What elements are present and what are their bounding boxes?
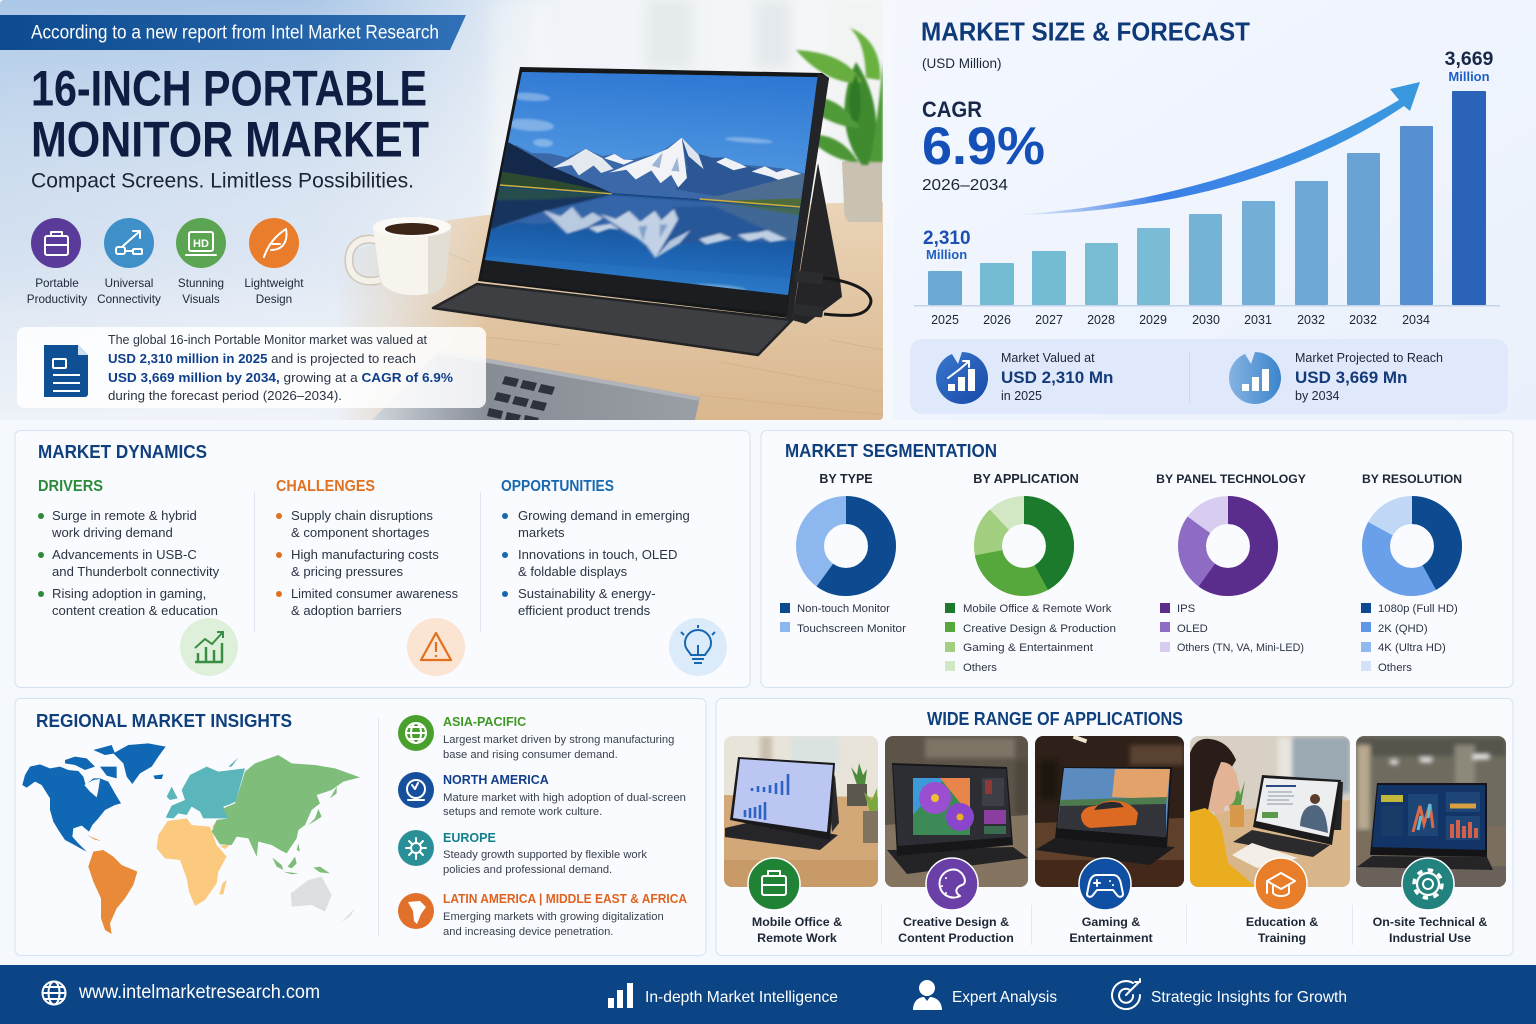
map: south america — [87, 835, 137, 934]
stat: market projected — [1295, 351, 1443, 403]
value label 2025 — [923, 228, 971, 262]
map: north america — [22, 745, 121, 852]
column: drivers — [38, 478, 238, 676]
stat: market projected: by 2034 — [1295, 389, 1340, 403]
desk — [300, 202, 883, 420]
icon: bars — [608, 983, 633, 1008]
map: africa — [157, 818, 232, 906]
legend: Others — [963, 662, 997, 674]
map: hudson bay — [84, 779, 100, 797]
icon: light bulb — [669, 618, 727, 676]
region: asia-pacific — [398, 715, 674, 761]
cable — [792, 271, 871, 318]
plant — [796, 28, 883, 222]
panel: regional market insights — [15, 698, 706, 956]
legend: 2K (QHD) — [1378, 623, 1428, 635]
CAGR callout — [922, 97, 1045, 194]
legend: Others (TN, VA, Mini-LED) — [1177, 642, 1304, 654]
icon: warning — [407, 618, 465, 676]
year labels: 2028 — [1087, 313, 1115, 327]
donut: by application — [945, 472, 1116, 674]
feature labels: Portable — [35, 277, 79, 290]
monitor base cover — [433, 284, 792, 355]
title: MONITOR MARKET — [31, 112, 429, 168]
heading: MARKET SIZE & FORECAST — [921, 16, 1250, 46]
map: asia — [212, 755, 360, 874]
application labels: Content Production — [898, 931, 1014, 945]
column: challenges: High manufacturing costs — [291, 547, 439, 562]
year labels: 2026 — [983, 313, 1011, 327]
year labels: 2025 — [931, 313, 959, 327]
application labels: Training — [1258, 931, 1306, 945]
icon: game controller — [1079, 858, 1131, 910]
column: opportunities — [501, 478, 727, 676]
subtitle: Compact Screens. Limitless Possibilities. — [31, 170, 414, 192]
column: opportunities: Innovations in touch, OLED — [518, 547, 677, 562]
column: opportunities: efficient product trends — [518, 603, 651, 618]
monitor frame — [478, 67, 829, 320]
column: challenges — [276, 478, 465, 676]
feature labels: Stunning — [178, 277, 224, 290]
value label 2034 — [1445, 48, 1494, 84]
stat: market projected: USD 3,669 Mn — [1295, 368, 1407, 387]
panel: market dynamics — [15, 430, 750, 688]
value label 2034: Million — [1448, 69, 1490, 84]
feature labels: Lightweight — [244, 277, 304, 290]
application labels: Education & — [1246, 915, 1318, 929]
year labels: 2031 — [1244, 313, 1272, 327]
value label 2034: 3,669 — [1445, 48, 1494, 70]
laptop — [372, 350, 700, 420]
photo: creative design — [885, 736, 1028, 887]
stat: market projected: Market Projected to Reach — [1295, 351, 1443, 365]
region: latin america, middle east and africa: Emerging markets with growing digitalization — [443, 911, 664, 923]
column: drivers: Rising adoption in gaming, — [52, 586, 206, 601]
banner — [0, 15, 466, 50]
icon: expert — [913, 980, 942, 1010]
icon: lightweight design — [249, 218, 299, 268]
title — [31, 60, 429, 168]
world map — [22, 743, 360, 934]
column: drivers: and Thunderbolt connectivity — [52, 564, 220, 579]
year labels: 2030 — [1192, 313, 1220, 327]
donut: by panel technology: BY PANEL TECHNOLOGY — [1156, 472, 1306, 486]
region: latin america, middle east and africa — [398, 892, 687, 938]
region: latin america, middle east and africa: LATIN AMERICA | MIDDLE EAST & AFRICA — [443, 892, 687, 906]
summary text: USD 3,669 million by 2034, growing at a CAGR of 6.9% — [108, 370, 453, 385]
heading: REGIONAL MARKET INSIGHTS — [36, 711, 292, 731]
legend: Creative Design & Production — [963, 623, 1116, 635]
legend: 4K (Ultra HD) — [1378, 642, 1446, 654]
application labels: Gaming & — [1082, 915, 1140, 929]
monitor screen: mountains and lake — [485, 72, 818, 295]
year labels — [931, 313, 1430, 327]
column: opportunities: markets — [518, 525, 565, 540]
panel: market segmentation — [761, 430, 1513, 688]
icon: portable productivity — [31, 218, 81, 268]
stat: market valued: USD 2,310 Mn — [1001, 368, 1113, 387]
CAGR callout: 6.9% — [922, 117, 1045, 176]
icon: document — [44, 345, 88, 397]
heading: MARKET SEGMENTATION — [785, 441, 997, 461]
value label 2025: 2,310 — [923, 228, 971, 249]
donut: by type — [780, 472, 906, 635]
legend: OLED — [1177, 623, 1208, 635]
column: drivers: Advancements in USB-C — [52, 547, 197, 562]
panel: wide range of applications — [716, 698, 1513, 956]
legend: Touchscreen Monitor — [797, 623, 906, 635]
map: greenland — [113, 743, 166, 784]
icon: market valued — [936, 352, 988, 404]
bar chart — [914, 91, 1500, 327]
legend — [780, 603, 906, 635]
icon: palette — [926, 858, 978, 910]
feature labels: Visuals — [182, 293, 220, 306]
legend: Others — [1378, 662, 1412, 674]
label: strategic insights: Strategic Insights for Growth — [1151, 989, 1347, 1006]
photo: mobile office — [724, 736, 878, 887]
column: drivers: Surge in remote & hybrid — [52, 508, 197, 523]
application labels: Industrial Use — [1389, 931, 1471, 945]
column: drivers: DRIVERS — [38, 478, 103, 495]
title: 16-INCH PORTABLE — [31, 60, 427, 116]
region: latin america, middle east and africa: and increasing device penetration. — [443, 926, 613, 938]
mountain range — [495, 125, 818, 207]
year labels: 2034 — [1402, 313, 1430, 327]
legend — [1160, 603, 1304, 654]
CAGR callout: 2026–2034 — [922, 177, 1008, 194]
banner: According to a new report from Intel Market Research — [31, 22, 439, 44]
photo: education — [1190, 736, 1350, 887]
panel: market size and forecast — [893, 0, 1536, 420]
summary text — [108, 332, 453, 403]
arrow: growth trend — [1015, 82, 1420, 215]
column: challenges: & component shortages — [291, 525, 430, 540]
column: opportunities: Sustainability & energy- — [518, 586, 656, 601]
heading: WIDE RANGE OF APPLICATIONS — [927, 709, 1183, 729]
icon: target — [1112, 979, 1140, 1009]
legend — [945, 603, 1116, 674]
label: expert analysis: Expert Analysis — [952, 989, 1057, 1006]
region: europe: policies and professional demand. — [443, 864, 612, 876]
summary text: The global 16-inch Portable Monitor market was valued at — [108, 332, 427, 347]
application labels: On-site Technical & — [1373, 915, 1487, 929]
icon: graduation cap — [1255, 858, 1307, 910]
region: asia-pacific: ASIA-PACIFIC — [443, 715, 526, 729]
column: challenges: Supply chain disruptions — [291, 508, 433, 523]
CAGR callout: CAGR — [922, 97, 982, 122]
column: drivers: work driving demand — [51, 525, 173, 540]
legend: 1080p (Full HD) — [1378, 603, 1458, 615]
stat: market valued: in 2025 — [1001, 389, 1042, 403]
region: europe — [398, 830, 647, 876]
donut: by panel technology — [1156, 472, 1306, 654]
donut: by application: BY APPLICATION — [973, 472, 1079, 486]
photo: industrial — [1356, 736, 1506, 887]
column: opportunities: OPPORTUNITIES — [501, 478, 614, 495]
column: challenges: & adoption barriers — [291, 603, 402, 618]
feature labels: Design — [256, 293, 292, 306]
legend: Non-touch Monitor — [797, 603, 890, 615]
website: www.intelmarketresearch.com — [78, 982, 320, 1003]
year labels: 2027 — [1035, 313, 1063, 327]
donut: by resolution: BY RESOLUTION — [1362, 472, 1462, 486]
icon: briefcase — [748, 858, 800, 910]
legend: Gaming & Entertainment — [963, 642, 1094, 654]
stat strip — [910, 339, 1508, 414]
icon: market projected — [1229, 352, 1281, 404]
region: north america — [398, 772, 686, 818]
icon row: features — [31, 218, 299, 268]
region: asia-pacific: base and rising consumer demand. — [443, 749, 618, 761]
mug — [349, 217, 451, 295]
feature labels: Universal — [105, 277, 153, 290]
icon: gear — [1402, 858, 1454, 910]
monitor side edge — [786, 73, 829, 320]
map: australia — [291, 877, 355, 922]
feature labels: Productivity — [27, 293, 87, 306]
icon: growth chart — [180, 618, 238, 676]
footer — [0, 965, 1536, 1024]
column: challenges: Limited consumer awareness — [291, 586, 458, 601]
summary text: during the forecast period (2026–2034). — [108, 388, 342, 403]
application labels: Remote Work — [757, 931, 837, 945]
feature labels — [27, 277, 304, 306]
column: challenges: CHALLENGES — [276, 478, 375, 495]
region: north america: setups and remote work culture. — [443, 806, 602, 818]
photo: gaming — [1035, 735, 1184, 887]
column: drivers: content creation & education — [52, 603, 218, 618]
region: north america: Mature market with high adoption of dual-screen — [443, 792, 686, 804]
column: opportunities: Growing demand in emerging — [518, 508, 690, 523]
legend: Mobile Office & Remote Work — [963, 603, 1112, 615]
year labels: 2032 — [1349, 313, 1377, 327]
label: market intelligence: In-depth Market Intelligence — [645, 989, 838, 1006]
unit note: (USD Million) — [922, 56, 1002, 71]
year labels: 2032 — [1297, 313, 1325, 327]
application labels — [752, 915, 1487, 945]
summary card — [17, 327, 486, 408]
icon: stunning visuals — [176, 218, 226, 268]
application labels: Mobile Office & — [752, 915, 842, 929]
region: north america: NORTH AMERICA — [443, 773, 549, 787]
column: opportunities: & foldable displays — [518, 564, 628, 579]
value label 2025: Million — [926, 247, 967, 262]
lake reflection — [491, 186, 800, 259]
donut: by type: BY TYPE — [819, 472, 873, 486]
panel: hero — [0, 0, 883, 420]
map: europe — [166, 758, 245, 818]
icon: stunning visuals: HD — [193, 238, 209, 250]
region: europe: Steady growth supported by flexible work — [443, 849, 647, 861]
application labels: Entertainment — [1069, 931, 1153, 945]
feature labels: Connectivity — [97, 293, 161, 306]
column: challenges: & pricing pressures — [291, 564, 404, 579]
hero photo: desk with portable monitor — [0, 0, 883, 420]
region: asia-pacific: Largest market driven by strong manufacturing — [443, 734, 674, 746]
icon: globe — [42, 982, 66, 1004]
donut: by resolution — [1361, 472, 1462, 674]
summary text: USD 2,310 million in 2025 and is projected to reach — [108, 351, 416, 366]
application labels: Creative Design & — [903, 915, 1009, 929]
legend — [1361, 603, 1458, 674]
region: europe: EUROPE — [443, 831, 496, 845]
stat: market valued: Market Valued at — [1001, 351, 1095, 365]
legend: IPS — [1177, 603, 1196, 615]
heading: MARKET DYNAMICS — [38, 442, 207, 462]
monitor stand — [792, 163, 842, 324]
year labels: 2029 — [1139, 313, 1167, 327]
stat: market valued — [1001, 351, 1113, 403]
icon: universal connectivity — [104, 218, 154, 268]
